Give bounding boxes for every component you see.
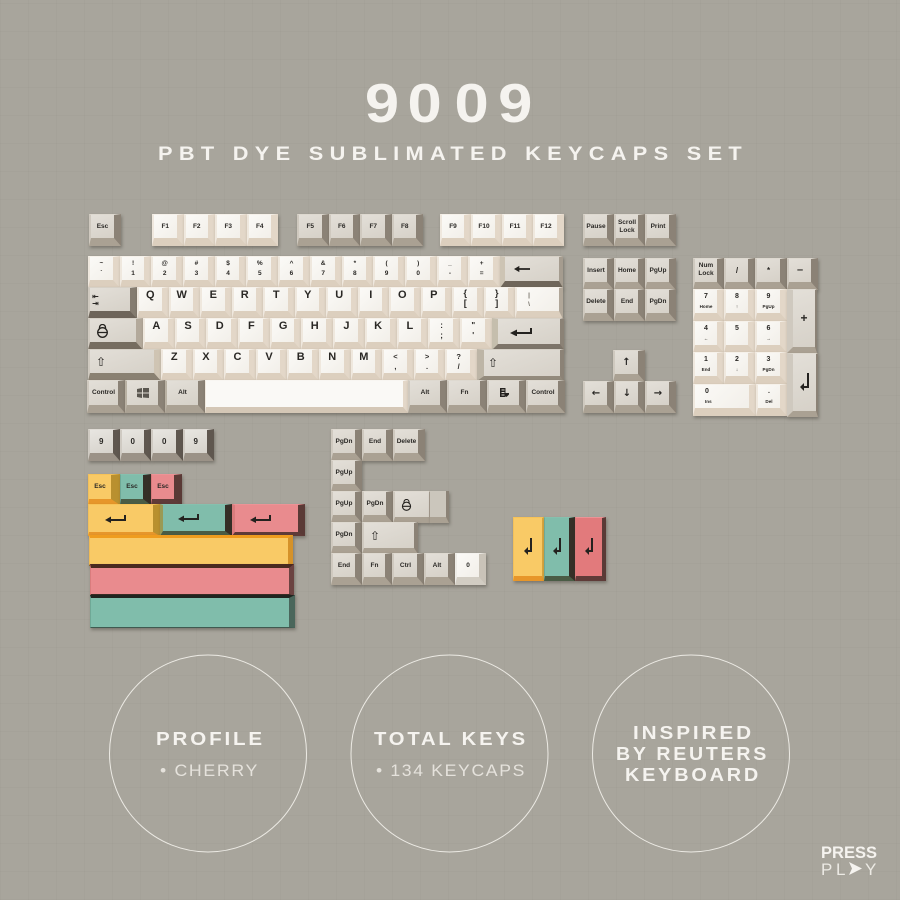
bottom letter row: , [394, 362, 396, 370]
home row: D [216, 320, 224, 332]
digits 1 2 3: 1 [704, 356, 708, 362]
bottom letter row: / [458, 362, 460, 370]
number row: ` [100, 270, 102, 276]
panel: function row, F1 to F4: F3 [224, 223, 232, 230]
number row: $ [226, 260, 230, 266]
digits 4 5 6: → [766, 336, 771, 340]
panel: function row, F9 to F12: F12 [540, 223, 552, 230]
info circle: profile: • CHERRY [160, 761, 259, 780]
number row: ~ [99, 260, 103, 266]
row: page down, shift: PgDn [336, 531, 352, 538]
digits 4 5 6: 4 [704, 324, 708, 332]
number row: ) [417, 260, 419, 266]
info circle: inspired by Reuters keyboard [592, 655, 790, 852]
digits 1 2 3: PgDn [762, 366, 774, 372]
number row: 2 [163, 270, 167, 276]
number row: 1 [131, 270, 135, 276]
panel: pause, scroll lock, print: Scroll [618, 218, 636, 226]
number row: ^ [290, 260, 293, 266]
bottom letter row: < [393, 352, 398, 360]
panel: function row, F9 to F12: F10 [478, 223, 490, 230]
QWERTY row: R [241, 289, 249, 301]
home row: J [343, 320, 350, 332]
panel: function row, F1 to F4: F2 [193, 223, 201, 230]
top numpad operators: – [797, 264, 803, 276]
panel: pause, scroll lock, print: Lock [619, 226, 635, 234]
number row: & [321, 260, 326, 266]
info circle: inspired by Reuters keyboard: INSPIRED [633, 723, 754, 743]
digits 1 2 3 [692, 352, 787, 385]
number row: % [257, 260, 263, 266]
panel: function row, F9 to F12 [440, 214, 566, 250]
QWERTY row: { [463, 288, 467, 298]
panel: 9009 novelty keys: 0 [162, 437, 166, 446]
icon: enter arrow [250, 515, 271, 523]
row: page down, end, delete: PgDn [336, 438, 352, 445]
bottom letter row: . [426, 362, 428, 370]
panel: extra grey keys [330, 429, 488, 588]
home row: : [440, 320, 443, 330]
info circle: total keys: TOTAL KEYS [374, 729, 528, 749]
bottom letter row: C [234, 351, 241, 363]
number row: + [480, 260, 483, 266]
QWERTY row: \ [528, 300, 530, 308]
digits 1 2 3: ↓ [736, 366, 738, 372]
left down right arrow keys [582, 381, 678, 416]
coloured enter keys [88, 504, 308, 540]
number row: 5 [258, 270, 262, 276]
row: end, fn, ctrl, alt, 0: 0 [466, 562, 470, 569]
digits 4 5 6: ← [704, 336, 708, 340]
modifier and space row: Alt [178, 389, 187, 396]
QWERTY row: O [398, 289, 407, 301]
delete end page down row: End [621, 298, 633, 305]
panel: function row, F9 to F12: F9 [449, 223, 457, 230]
QWERTY row: [ [464, 298, 467, 308]
logo: Press Play: PRESS [821, 843, 877, 862]
row: page down, end, delete [330, 429, 428, 464]
panel: pause, scroll lock, print [582, 214, 678, 250]
panel: function row, F1 to F4: F1 [161, 223, 169, 230]
row: page down, shift: ⇧ [370, 528, 380, 542]
panel: function row, F5 to F8: F8 [401, 223, 409, 230]
top numpad operators [692, 258, 820, 293]
panel: function row, F5 to F8: F7 [369, 223, 377, 230]
icon: enter arrow [524, 538, 532, 556]
number row: - [449, 270, 451, 276]
row: page up, page down, lock: PgDn [366, 500, 383, 507]
logo: Press Play [821, 843, 877, 879]
modifier and space row [86, 380, 568, 416]
insert home page up row: Insert [587, 267, 605, 274]
insert home page up row: Home [618, 267, 636, 274]
bottom letter row: B [297, 351, 305, 363]
pink vertical enter [575, 517, 606, 581]
bottom letter row: Z [171, 351, 178, 363]
bottom letter row [88, 349, 566, 383]
panel: 9009 novelty keys [88, 429, 216, 464]
panel: navigation cluster [582, 258, 679, 324]
panel: coloured accent keys [87, 474, 308, 632]
bottom letter row: > [425, 352, 429, 360]
number row: # [195, 260, 198, 266]
row: end, fn, ctrl, alt, 0: End [338, 562, 350, 569]
teal vertical enter [544, 517, 575, 581]
panel: function row, F1 to F4 [152, 214, 280, 250]
delete end page down row: PgDn [650, 298, 666, 305]
numpad enter key [787, 353, 818, 417]
panel: function row, F5 to F8: F5 [306, 223, 314, 230]
digits 4 5 6: 5 [735, 325, 739, 332]
icon: menu key [500, 388, 509, 397]
number row: 6 [290, 270, 293, 276]
digit 0 and decimal: Del [765, 398, 773, 404]
panel: 9009 novelty keys: 9 [99, 437, 103, 446]
row: page up, page down, lock [330, 491, 452, 526]
home row: H [311, 320, 319, 332]
row: end, fn, ctrl, alt, 0: Fn [371, 562, 378, 569]
number row: 9 [385, 270, 388, 276]
home row: A [152, 320, 160, 332]
modifier and space row: Fn [461, 389, 468, 396]
QWERTY row: ⇤ [92, 292, 99, 300]
digits 7 8 9 [692, 289, 787, 322]
row: end, fn, ctrl, alt, 0: Ctrl [400, 562, 411, 569]
QWERTY row: E [210, 289, 217, 301]
coloured escape keys: Esc [94, 483, 106, 490]
row: page down, shift [331, 522, 418, 554]
panel: function row, F5 to F8 [296, 214, 426, 250]
coloured escape keys [88, 474, 184, 506]
panel: function row, F1 to F4: F4 [256, 223, 264, 230]
QWERTY row: | [528, 292, 530, 298]
info circle: inspired by Reuters keyboard: KEYBOARD [625, 765, 761, 785]
number row: _ [448, 260, 452, 266]
number row: ! [132, 260, 134, 266]
delete end page down row [582, 289, 678, 324]
number row: = [480, 270, 483, 276]
QWERTY row: I [369, 289, 372, 301]
modifier and space row: Control [92, 389, 115, 396]
digit 0 and decimal: Ins [705, 398, 712, 404]
icon: backspace arrow [514, 266, 530, 272]
modifier and space row: Control [531, 389, 555, 396]
icon: enter arrow [178, 514, 199, 522]
bottom letter row: N [328, 351, 336, 363]
home row [88, 318, 566, 353]
number row [88, 256, 566, 291]
panel: function row, F9 to F12: F11 [510, 223, 520, 230]
bottom letter row: ⇧ [96, 354, 106, 368]
QWERTY row: W [177, 289, 187, 301]
number row: 3 [195, 270, 198, 276]
digits 7 8 9: 8 [735, 292, 739, 300]
modifier and space row: Alt [421, 389, 429, 396]
icon: enter arrow [585, 538, 593, 556]
info circle: total keys: • 134 KEYCAPS [376, 761, 526, 780]
icon: enter arrow vertical [800, 373, 809, 391]
subtitle: PBT DYE SUBLIMATED KEYCAPS SET [158, 144, 748, 165]
plus key: + [800, 311, 808, 325]
QWERTY row [88, 287, 566, 321]
QWERTY row: Q [146, 289, 155, 301]
home row: G [279, 320, 287, 332]
info circle: profile [110, 655, 306, 852]
digits 7 8 9: 7 [704, 292, 708, 300]
QWERTY row: ⇥ [92, 298, 99, 308]
row: end, fn, ctrl, alt, 0: Alt [433, 562, 441, 569]
panel: pause, scroll lock, print: Pause [586, 223, 606, 230]
title: 9009: 9009 [365, 73, 532, 134]
QWERTY row: T [273, 289, 280, 301]
icon: windows logo [137, 388, 149, 398]
panel: arrow keys [582, 350, 678, 416]
digits 4 5 6: 6 [767, 324, 770, 332]
insert home page up row [582, 258, 678, 293]
left down right arrow keys: → [654, 388, 662, 398]
number row: 4 [226, 270, 230, 276]
home row: K [374, 320, 382, 332]
row: end, fn, ctrl, alt, 0 [331, 553, 486, 585]
bottom letter row: ⇧ [488, 356, 498, 370]
logo: Press Play: Y [865, 860, 876, 879]
QWERTY row: P [430, 289, 437, 301]
top numpad operators: * [767, 266, 770, 275]
digits 1 2 3: 2 [735, 356, 739, 362]
row: page up: PgUp [336, 469, 352, 476]
digit 0 and decimal: 0 [705, 388, 709, 394]
digits 4 5 6 [692, 321, 787, 354]
QWERTY row: Y [304, 289, 311, 301]
teal spacebar [90, 595, 295, 628]
number row: 8 [353, 270, 357, 276]
number row: 0 [416, 270, 420, 276]
digits 7 8 9: ↑ [736, 304, 738, 308]
home row: F [248, 320, 255, 332]
logo: Press Play: PL [821, 860, 845, 879]
icon: lock [97, 324, 108, 338]
home row: ; [440, 330, 443, 340]
panel: coloured vertical enter keys [513, 517, 606, 581]
row: page down, end, delete: Delete [397, 438, 416, 445]
panel: function row, F5 to F8: F6 [338, 223, 346, 230]
top numpad operators: / [736, 266, 738, 275]
icon: enter arrow [105, 515, 126, 523]
delete end page down row: Delete [586, 298, 606, 305]
panel: pause, scroll lock, print: Print [651, 223, 665, 230]
yellow vertical enter [513, 517, 544, 581]
top numpad operators: Num [699, 262, 713, 269]
coloured escape keys: Esc [157, 483, 169, 490]
bottom letter row: M [359, 351, 368, 363]
QWERTY row: ] [495, 298, 498, 308]
info circle: profile: PROFILE [156, 729, 265, 749]
digit 0 and decimal: . [768, 388, 770, 394]
row: page up, page down, lock: PgUp [336, 500, 352, 507]
panel: 9009 novelty keys: 9 [194, 437, 198, 446]
up arrow key: ↑ [622, 356, 631, 368]
bottom letter row: V [265, 351, 273, 363]
icon: enter arrow [553, 538, 561, 556]
home row: " [471, 320, 475, 330]
insert home page up row: PgUp [650, 267, 666, 274]
panel: numeric keypad [692, 258, 820, 420]
home row: L [406, 320, 413, 332]
digits 1 2 3: 3 [767, 356, 770, 362]
QWERTY row: U [335, 289, 343, 301]
info circle: total keys [351, 655, 548, 852]
digits 1 2 3: End [702, 366, 710, 372]
coloured escape keys: Esc [126, 483, 138, 490]
number row: 7 [321, 270, 325, 276]
home row: ' [472, 330, 474, 340]
digits 7 8 9: 9 [767, 292, 770, 300]
number row: * [354, 260, 356, 266]
digits 7 8 9: Home [700, 304, 712, 308]
digit 0 and decimal [692, 384, 789, 420]
icon: lock [401, 498, 412, 510]
left down right arrow keys: ← [592, 388, 600, 398]
pink spacebar [90, 564, 294, 596]
number row: @ [162, 260, 168, 266]
digits 7 8 9: PgUp [762, 304, 774, 308]
plus key [787, 289, 817, 353]
panel: 9009 novelty keys: 0 [131, 437, 135, 446]
number row: ( [385, 260, 388, 266]
QWERTY row: } [495, 288, 498, 298]
bottom letter row: X [202, 351, 210, 363]
left down right arrow keys: ↓ [623, 388, 631, 398]
panel: main keyboard block [86, 256, 568, 416]
home row: S [184, 320, 192, 332]
icon: enter arrow [510, 328, 532, 336]
row: page down, end, delete: End [369, 438, 381, 445]
bottom letter row: ? [456, 352, 461, 360]
top numpad operators: Lock [698, 270, 714, 277]
panel: function row, escape: Esc [97, 223, 108, 230]
info circle: inspired by Reuters keyboard: BY REUTERS [616, 744, 769, 764]
yellow spacebar [89, 535, 293, 566]
